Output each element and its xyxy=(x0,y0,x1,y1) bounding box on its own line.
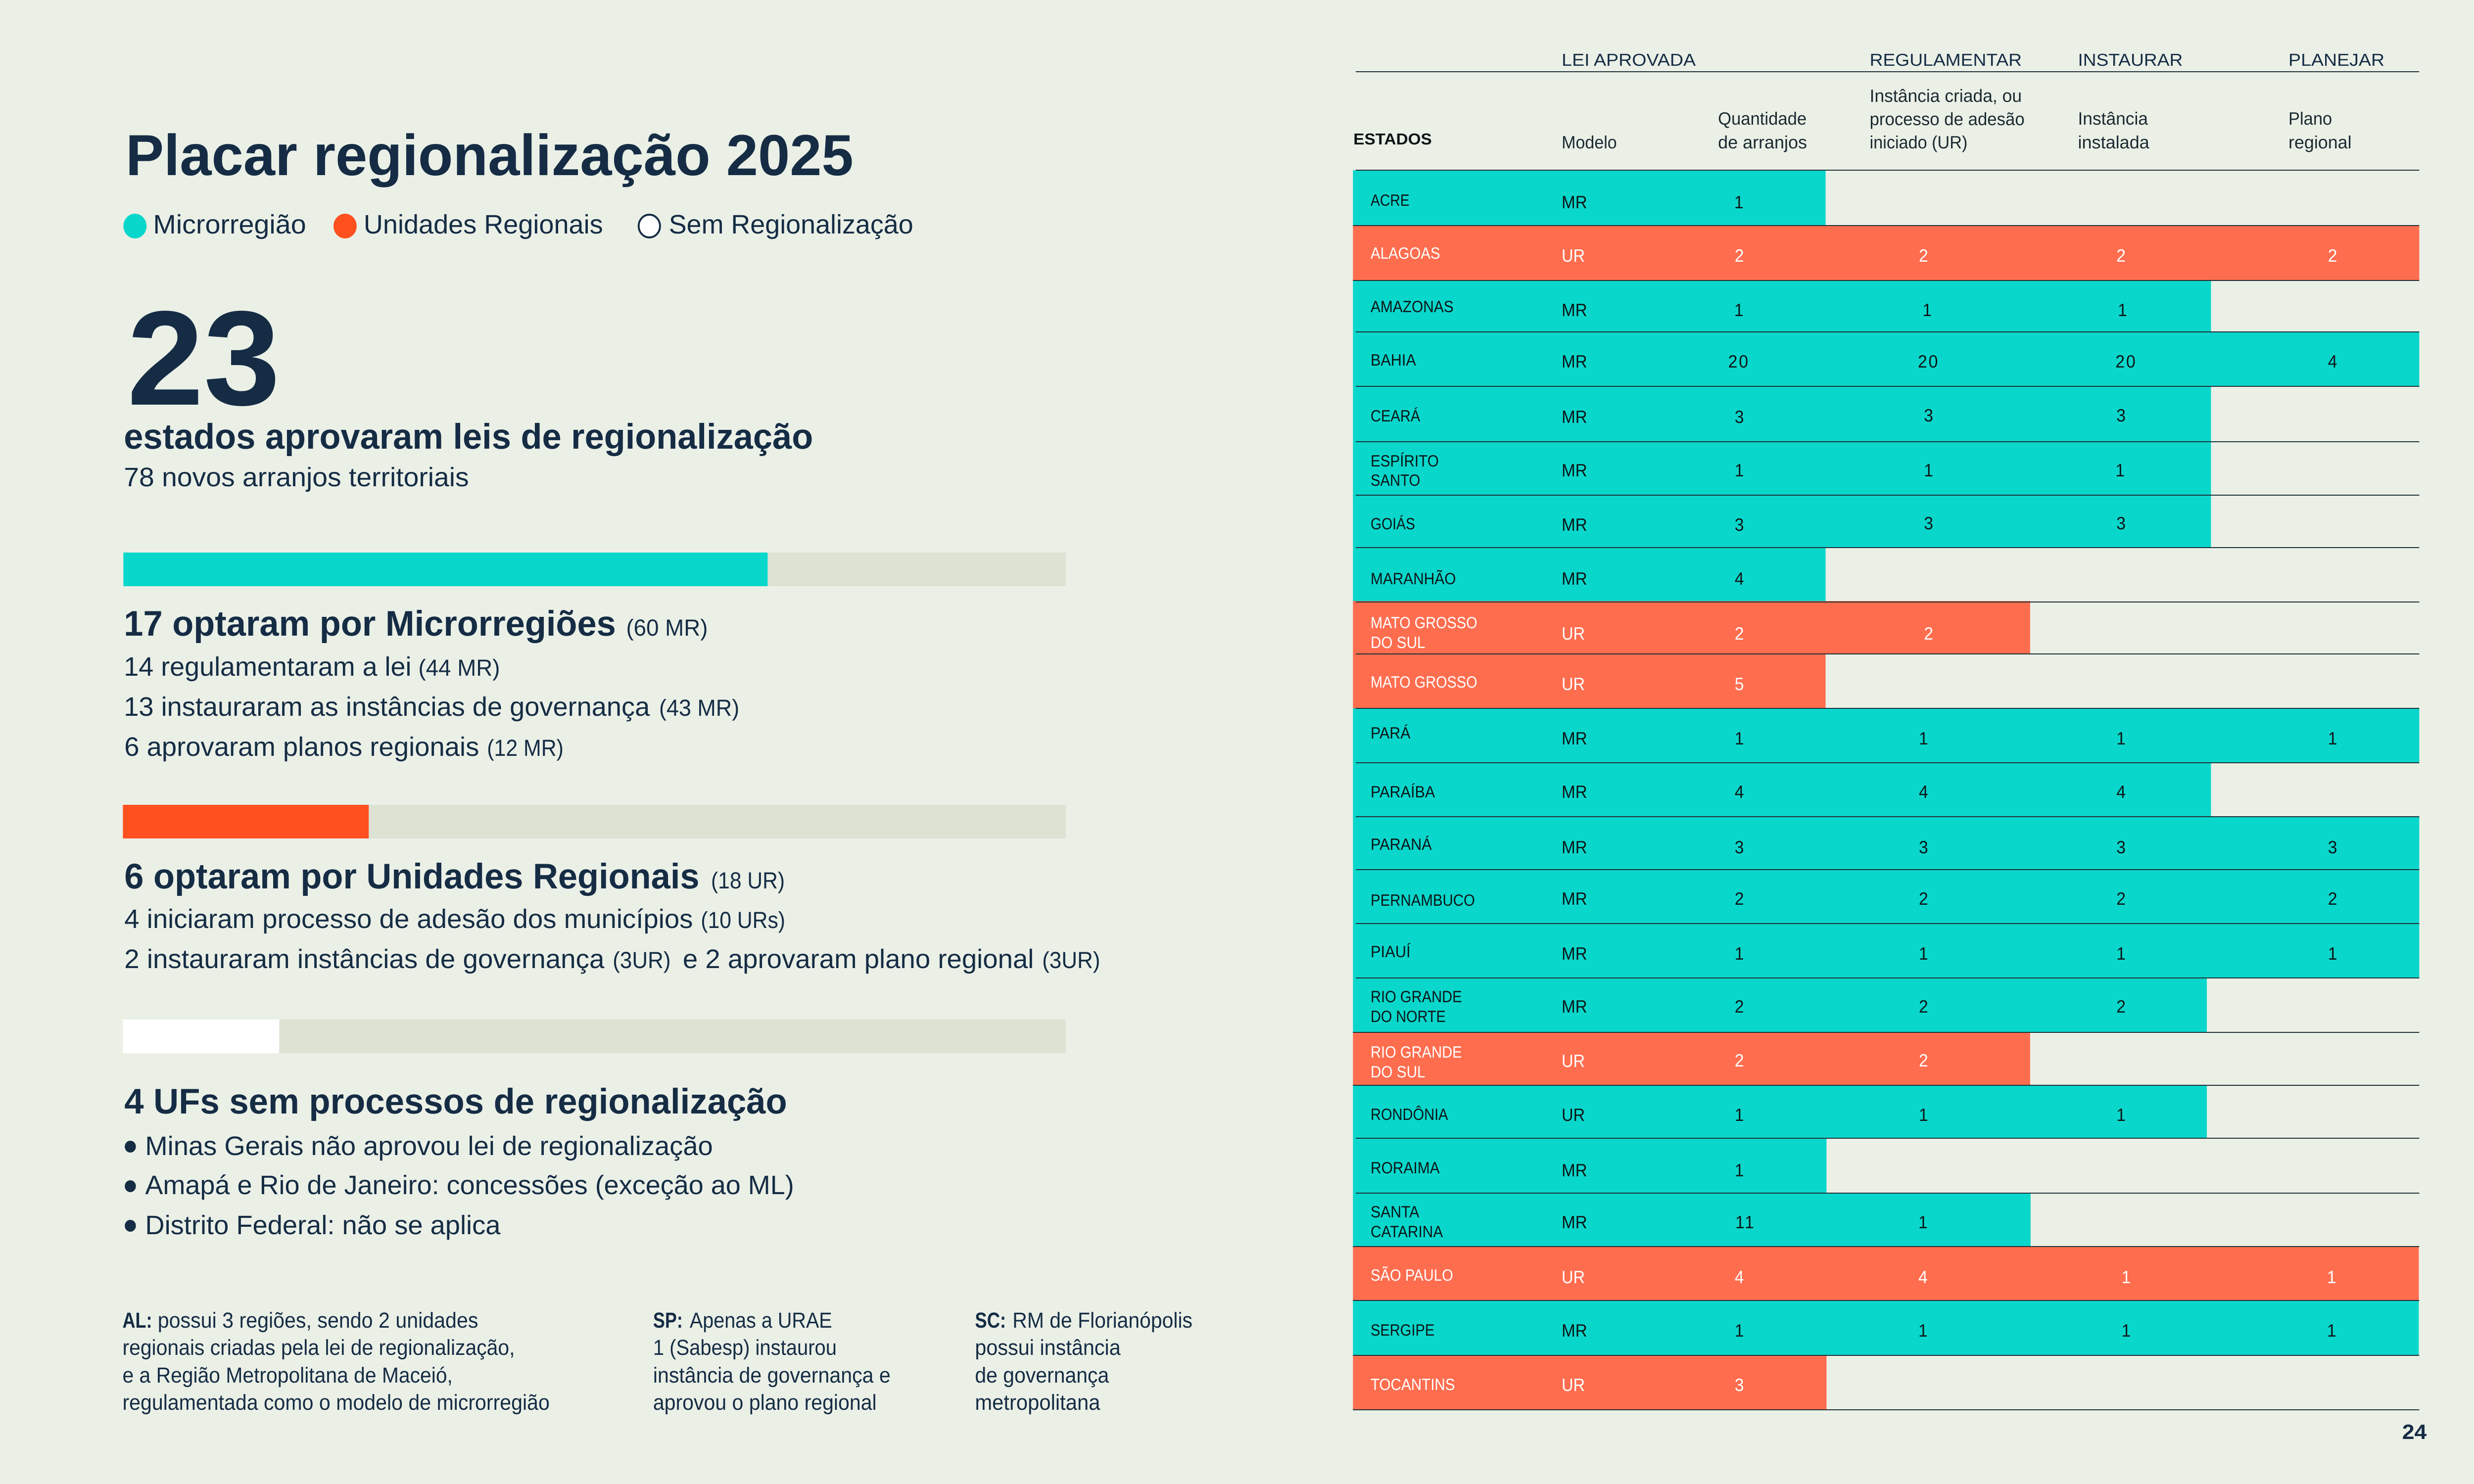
row: Mato Grosso do Sul: 2 xyxy=(1735,623,1744,644)
row: Sergipe: SERGIPE xyxy=(1371,1321,1434,1339)
footnote: AL: e a Região Metropolitana de Maceió, xyxy=(122,1363,453,1388)
row: Alagoas: UR xyxy=(1562,245,1585,266)
row: Ceará xyxy=(1353,386,2211,442)
text block: microrregiões: (43 MR) xyxy=(659,695,739,721)
row: Rondônia: 1 xyxy=(1735,1105,1744,1125)
row: Pernambuco: 2 xyxy=(2328,888,2337,909)
text block: unidades regionais: (3UR) xyxy=(613,947,670,973)
table header: INSTAURAR xyxy=(2078,50,2183,70)
row: Acre: 1 xyxy=(1734,192,1744,212)
row: Rio Grande do Norte: RIO GRANDE xyxy=(1371,987,1462,1006)
row: Paraná: MR xyxy=(1562,837,1587,857)
footnote: AL xyxy=(122,1308,550,1415)
row: Piauí: MR xyxy=(1562,943,1587,964)
row: Espírito Santo: 1 xyxy=(2115,460,2125,480)
footnote: SP: 1 (Sabesp) instaurou xyxy=(653,1336,837,1360)
footnote: SC: RM de Florianópolis xyxy=(1012,1308,1192,1333)
row: Paraíba: 4 xyxy=(1919,782,1928,802)
row: Alagoas: 2 xyxy=(1919,245,1928,266)
row: Santa Catarina: MR xyxy=(1562,1212,1587,1232)
row: Rio Grande do Norte: DO NORTE xyxy=(1371,1007,1446,1025)
row: Acre: ACRE xyxy=(1371,191,1410,209)
table header: LEI APROVADA xyxy=(1562,50,1696,70)
footnote: AL: regulamentada como o modelo de microrregião xyxy=(122,1391,550,1415)
row: Bahia xyxy=(1353,332,2419,386)
row: Ceará: 3 xyxy=(2116,405,2126,425)
row: Piauí xyxy=(1353,924,2419,978)
row: Acre: MR xyxy=(1562,192,1587,212)
row: Mato Grosso: UR xyxy=(1562,674,1585,694)
row: Rio Grande do Norte xyxy=(1353,978,2207,1032)
row: Maranhão: MARANHÃO xyxy=(1371,569,1456,588)
row: Pará: PARÁ xyxy=(1371,724,1411,742)
footnote: SC xyxy=(975,1308,1192,1415)
row: Bahia: 20 xyxy=(2115,351,2137,371)
row: Pernambuco: 2 xyxy=(1919,888,1928,909)
row: Mato Grosso: 5 xyxy=(1735,674,1744,694)
row: Maranhão xyxy=(1353,548,1826,602)
row: Santa Catarina: 1 xyxy=(1918,1212,1928,1232)
table header: Instância xyxy=(2078,108,2148,129)
row: Rio Grande do Sul: UR xyxy=(1562,1051,1585,1071)
legend item: Sem Regionalização: Sem Regionalização xyxy=(669,210,913,239)
row: Amazonas: 1 xyxy=(1734,300,1744,320)
row: Paraná: 3 xyxy=(2116,837,2126,857)
text block: unidades regionais: 2 instauraram instâncias de governança xyxy=(124,944,605,974)
row: Paraná: PARANÁ xyxy=(1371,835,1432,853)
footnote: SP: instância de governança e xyxy=(653,1363,891,1388)
row: Tocantins: 3 xyxy=(1735,1375,1744,1395)
row: Espírito Santo: 1 xyxy=(1924,460,1933,480)
row: Rondônia: 1 xyxy=(2116,1105,2126,1125)
footnote: SC: possui instância xyxy=(975,1336,1121,1360)
footnote: AL: AL: xyxy=(122,1308,152,1333)
row: Santa Catarina: CATARINA xyxy=(1371,1222,1443,1241)
text block: UFs sem processos: Minas Gerais não aprovou lei de regionalização xyxy=(145,1131,713,1161)
text block: unidades regionais: (10 URs) xyxy=(701,907,785,933)
row: Tocantins: TOCANTINS xyxy=(1371,1375,1455,1393)
subtitle: estados aprovaram leis de regionalização xyxy=(124,417,813,457)
row: Ceará: MR xyxy=(1562,407,1587,427)
row: São Paulo: 1 xyxy=(2122,1267,2131,1287)
row: Rio Grande do Norte: 2 xyxy=(1919,996,1928,1017)
table header: processo de adesão xyxy=(1870,109,2025,129)
row: Bahia: 20 xyxy=(1728,351,1750,371)
text block: microrregiões: 14 regulamentaram a lei xyxy=(124,652,411,682)
row: Rio Grande do Norte: 2 xyxy=(1735,996,1744,1017)
table: placar por estado xyxy=(1353,50,2419,1410)
row: Pará: 1 xyxy=(2116,728,2126,748)
table header xyxy=(1353,50,2419,152)
row: Amazonas: AMAZONAS xyxy=(1371,297,1454,316)
row: Tocantins: UR xyxy=(1562,1375,1585,1395)
row: Santa Catarina: 11 xyxy=(1735,1212,1756,1232)
row: Bahia: 20 xyxy=(1918,351,1939,371)
row: Alagoas: ALAGOAS xyxy=(1371,244,1440,262)
legend item: Microrregião: Microrregião xyxy=(153,210,306,239)
text block: unidades regionais: (3UR) xyxy=(1042,947,1100,973)
heading: 4 UFs sem processos: 4 UFs sem processos de regionalização xyxy=(124,1082,787,1121)
row: Piauí: 1 xyxy=(1919,943,1928,964)
row: Goiás: MR xyxy=(1562,514,1587,535)
row: Piauí: PIAUÍ xyxy=(1371,942,1411,961)
footnote: SC: de governança xyxy=(975,1363,1109,1388)
title: Placar regionalização 2025 xyxy=(126,123,854,187)
row: Amazonas xyxy=(1353,280,2211,332)
row: Paraná: 3 xyxy=(2328,837,2337,857)
legend xyxy=(123,210,913,239)
row: Rondônia xyxy=(1353,1085,2207,1138)
text block: microrregiões xyxy=(124,604,739,762)
row: Ceará: CEARÁ xyxy=(1371,407,1420,425)
row: Paraná: 3 xyxy=(1735,837,1744,857)
text block: unidades regionais: 4 iniciaram processo de adesão dos municípios xyxy=(124,904,693,934)
row: Piauí: 1 xyxy=(2116,943,2126,964)
row: Roraima: RORAIMA xyxy=(1371,1159,1440,1177)
text block: microrregiões: 13 instauraram as instâncias de governança xyxy=(124,692,650,722)
table header: Instância criada, ou xyxy=(1870,86,2022,106)
row: Acre xyxy=(1353,170,1826,226)
legend item: Unidades Regionais: Unidades Regionais xyxy=(364,210,603,239)
row: Amazonas: MR xyxy=(1562,300,1587,320)
footnote: SP xyxy=(653,1308,891,1415)
row: Espírito Santo: SANTO xyxy=(1371,471,1420,489)
row: Ceará: 3 xyxy=(1924,405,1933,425)
row: Sergipe: 1 xyxy=(2327,1320,2336,1341)
row: Piauí: 1 xyxy=(1735,943,1744,964)
row: Paraíba xyxy=(1353,763,2211,817)
number 23: 23 xyxy=(127,283,280,433)
row: Rio Grande do Sul xyxy=(1353,1032,2030,1085)
row: Rio Grande do Sul: 2 xyxy=(1919,1050,1928,1070)
row: Goiás xyxy=(1353,495,2211,548)
row: Roraima xyxy=(1353,1138,1826,1193)
row: Rio Grande do Norte: 2 xyxy=(2116,996,2126,1017)
row: Goiás: 3 xyxy=(2116,513,2126,533)
text block: microrregiões: 6 aprovaram planos regionais xyxy=(124,732,479,762)
row: Ceará: 3 xyxy=(1735,407,1744,427)
footnote: SP: SP: xyxy=(653,1308,683,1333)
row: Pernambuco: MR xyxy=(1562,888,1587,909)
row: Rio Grande do Sul: RIO GRANDE xyxy=(1371,1043,1462,1061)
row: Rondônia: 1 xyxy=(1919,1105,1928,1125)
row: São Paulo: 4 xyxy=(1918,1267,1928,1287)
table header: Plano xyxy=(2288,108,2332,129)
row: São Paulo: 1 xyxy=(2327,1267,2336,1287)
progress bar: unidades regionais xyxy=(123,805,1066,838)
text block: unidades regionais: (18 UR) xyxy=(711,867,785,893)
row: Mato Grosso do Sul xyxy=(1353,601,2030,654)
footnote: SC: SC: xyxy=(975,1308,1006,1333)
row: Alagoas xyxy=(1353,226,2419,280)
row: São Paulo: 4 xyxy=(1735,1267,1744,1287)
row: Bahia: 4 xyxy=(2328,351,2337,371)
footnote: SC: metropolitana xyxy=(975,1391,1100,1415)
row: Mato Grosso: MATO GROSSO xyxy=(1371,673,1477,691)
row: Alagoas: 2 xyxy=(2116,245,2126,266)
text block: microrregiões: (44 MR) xyxy=(419,654,500,681)
text block: UFs sem processos xyxy=(124,1082,794,1240)
text block: unidades regionais: e 2 aprovaram plano regional xyxy=(683,944,1034,974)
table header: REGULAMENTAR xyxy=(1870,50,2022,70)
arrangements line: 78 novos arranjos territoriais xyxy=(124,463,469,492)
text block: microrregiões: (12 MR) xyxy=(487,735,564,761)
footnote: SP: aprovou o plano regional xyxy=(653,1391,877,1415)
row: Espírito Santo: MR xyxy=(1562,460,1587,480)
text block: UFs sem processos: Amapá e Rio de Janeiro: concessões (exceção ao ML) xyxy=(145,1170,794,1200)
row: Pernambuco: 2 xyxy=(2116,888,2126,909)
row: Goiás: GOIÁS xyxy=(1371,514,1415,533)
row: Espírito Santo: 1 xyxy=(1735,460,1744,480)
row: São Paulo: UR xyxy=(1562,1267,1585,1287)
row: Maranhão: MR xyxy=(1562,568,1587,589)
row: Rio Grande do Sul: 2 xyxy=(1735,1050,1744,1070)
row: Paraná: 3 xyxy=(1919,837,1928,857)
row: Paraíba: MR xyxy=(1562,782,1587,802)
row: Pernambuco xyxy=(1353,870,2419,924)
table header: Quantidade xyxy=(1718,108,1807,129)
row: Maranhão: 4 xyxy=(1735,568,1744,589)
row: Paraná xyxy=(1353,817,2419,870)
row: Mato Grosso do Sul: UR xyxy=(1562,623,1585,644)
table header: Modelo xyxy=(1562,132,1617,152)
footnote: AL: possui 3 regiões, sendo 2 unidades xyxy=(158,1308,478,1333)
big number: 23 estados xyxy=(124,283,813,492)
footnote: AL: regionais criadas pela lei de regionalização, xyxy=(122,1336,515,1360)
row: Pará xyxy=(1353,708,2419,763)
row: Roraima: 1 xyxy=(1735,1160,1744,1180)
row: Rio Grande do Norte: MR xyxy=(1562,996,1587,1017)
row: Mato Grosso do Sul: 2 xyxy=(1924,623,1933,644)
row: Pernambuco: PERNAMBUCO xyxy=(1371,891,1475,909)
text block: unidades regionais xyxy=(124,857,1100,974)
table header: iniciado (UR) xyxy=(1870,132,1967,152)
table header: ESTADOS xyxy=(1353,130,1432,148)
text block: microrregiões: (60 MR) xyxy=(626,614,708,641)
row: São Paulo xyxy=(1353,1247,2419,1300)
progress bar: microrregiões xyxy=(123,553,1066,586)
row: São Paulo: SÃO PAULO xyxy=(1371,1266,1453,1284)
table header: de arranjos xyxy=(1718,132,1807,152)
row: Pará: 1 xyxy=(1735,728,1744,748)
row: Espírito Santo: ESPÍRITO xyxy=(1371,452,1439,470)
table header: regional xyxy=(2288,132,2352,152)
page number: 24 xyxy=(2402,1420,2427,1443)
row: Bahia: MR xyxy=(1562,351,1587,371)
row: Goiás: 3 xyxy=(1735,514,1744,535)
row: Piauí: 1 xyxy=(2328,943,2337,964)
row: Roraima: MR xyxy=(1562,1160,1587,1180)
row: Pará: 1 xyxy=(2328,728,2337,748)
row: Rio Grande do Sul: DO SUL xyxy=(1371,1063,1426,1081)
row: Amazonas: 1 xyxy=(1922,300,1932,320)
row: Espírito Santo xyxy=(1353,442,2211,495)
row: Rondônia: RONDÔNIA xyxy=(1371,1105,1448,1123)
row: Pará: MR xyxy=(1562,728,1587,748)
row: Pernambuco: 2 xyxy=(1735,888,1744,909)
row: Tocantins xyxy=(1353,1355,1826,1410)
heading: 17 optaram por Microrregiões: 17 optaram por Microrregiões xyxy=(124,604,616,644)
row: Mato Grosso xyxy=(1353,654,1826,708)
row: Amazonas: 1 xyxy=(2118,300,2127,320)
row: Alagoas: 2 xyxy=(2328,245,2337,266)
row: Santa Catarina: SANTA xyxy=(1371,1203,1419,1221)
row: Paraíba: 4 xyxy=(1735,782,1744,802)
text block: UFs sem processos: Distrito Federal: não se aplica xyxy=(145,1210,501,1240)
footnote: SP: Apenas a URAE xyxy=(690,1308,832,1333)
row: Sergipe: MR xyxy=(1562,1320,1587,1341)
row: Sergipe: 1 xyxy=(2122,1320,2131,1341)
table header: instalada xyxy=(2078,132,2150,152)
row: Alagoas: 2 xyxy=(1735,245,1744,266)
table header: PLANEJAR xyxy=(2288,50,2384,70)
row: Rondônia: UR xyxy=(1562,1105,1585,1125)
row: Mato Grosso do Sul: DO SUL xyxy=(1371,633,1426,651)
row: Santa Catarina xyxy=(1353,1193,2031,1247)
row: Paraíba: PARAÍBA xyxy=(1371,783,1435,801)
row: Sergipe: 1 xyxy=(1918,1320,1928,1341)
row: Pará: 1 xyxy=(1919,728,1928,748)
row: Sergipe xyxy=(1353,1300,2419,1355)
row: Sergipe: 1 xyxy=(1735,1320,1744,1341)
row: Bahia: BAHIA xyxy=(1371,351,1416,369)
progress bar: sem regionalização xyxy=(123,1020,1066,1053)
heading: 6 optaram por Unidades Regionais: 6 optaram por Unidades Regionais xyxy=(124,857,700,896)
row: Goiás: 3 xyxy=(1924,513,1933,533)
row: Paraíba: 4 xyxy=(2116,782,2126,802)
row: Mato Grosso do Sul: MATO GROSSO xyxy=(1371,613,1477,632)
